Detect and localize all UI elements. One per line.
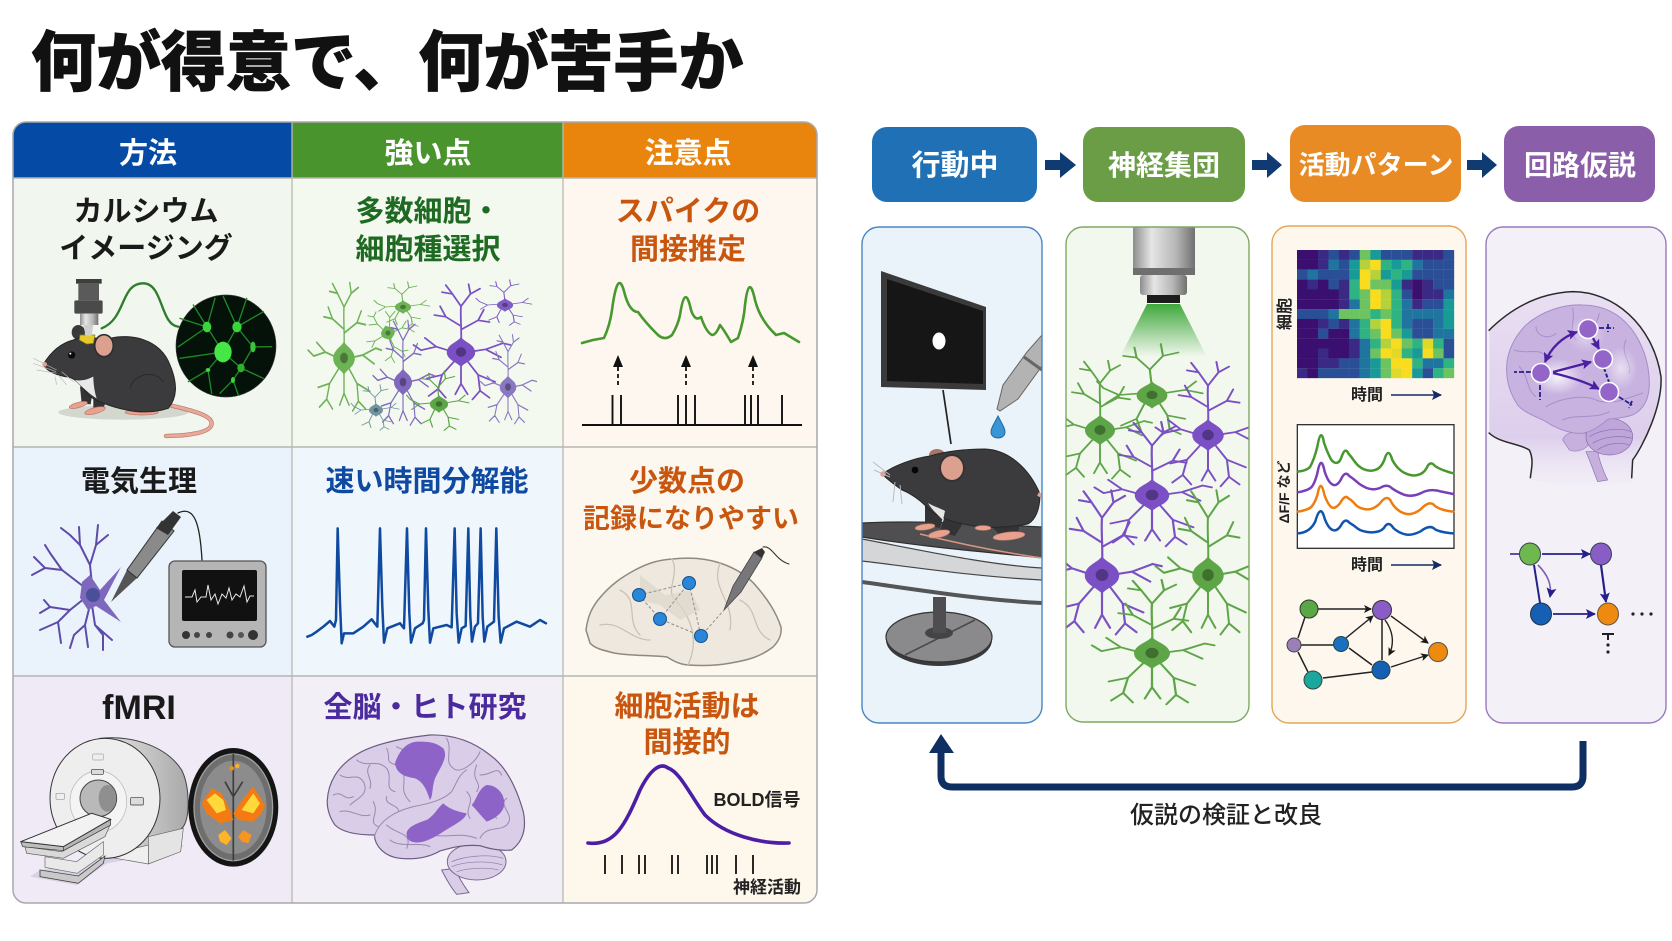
row 1 method label xyxy=(59,196,233,265)
pill: 行動中 xyxy=(872,127,1037,202)
panel: behaving mouse xyxy=(862,227,1042,723)
feedback label: 仮説の検証と改良 xyxy=(1130,802,1322,829)
row 3 caution label xyxy=(614,690,760,759)
illustration: whole brain with purple activation xyxy=(327,735,525,894)
chart: activity heatmap xyxy=(1297,250,1454,378)
pill: 神経集団 xyxy=(1083,127,1245,202)
row 1 caution label: 間接推定 xyxy=(630,233,746,266)
row 1 method label: イメージング xyxy=(59,232,233,265)
panel: neuron population xyxy=(1065,226,1250,723)
panel: comparison table xyxy=(13,122,817,903)
row 2 strength label: 速い時間分解能 xyxy=(325,465,529,498)
arrow xyxy=(1467,152,1497,178)
time axis label: 時間 xyxy=(1351,386,1383,404)
icon: reward nozzle and droplet xyxy=(991,335,1042,438)
pill: 活動パターン: 活動パターン xyxy=(1299,150,1453,180)
row 2 caution label xyxy=(583,465,799,534)
diagram: simplified circuit graph xyxy=(1510,543,1653,654)
diagram: activity network xyxy=(1287,600,1448,689)
panel: activity patterns xyxy=(1272,226,1466,723)
row 2 method label: 電気生理 xyxy=(81,465,197,498)
row 2 caution label: 少数点の xyxy=(629,465,745,498)
row 3 strength label: 全脳・ヒト研究 xyxy=(323,691,527,724)
icon: visual stimulus monitor xyxy=(881,271,986,444)
row 1 strength label: 細胞種選択 xyxy=(355,233,501,266)
illustration: treadmill and stand xyxy=(862,522,1042,666)
diagram: circuit overlay on brain xyxy=(1514,320,1632,408)
illustration: multiple neuron types xyxy=(308,280,537,430)
row 1 method label: カルシウム xyxy=(73,196,219,228)
row 3 caution label: 細胞活動は xyxy=(614,690,760,723)
row 1 strength label xyxy=(355,195,501,266)
title: 何が得意で、何が苦手か xyxy=(31,26,743,99)
row 1 strength label: 多数細胞・ xyxy=(355,195,501,228)
pill: 活動パターン xyxy=(1290,125,1461,202)
axis label: dF/F: ΔF/F など xyxy=(1276,461,1292,523)
time axis label xyxy=(1351,556,1441,574)
pill: 神経集団: 神経集団 xyxy=(1108,150,1220,181)
chart: fast spike electrophysiology trace xyxy=(307,528,546,643)
row 2 caution label: 記録になりやすい xyxy=(583,504,799,534)
illustration: head silhouette xyxy=(1489,292,1661,486)
header: 強い点: 強い点 xyxy=(384,137,472,170)
illustration: electrode, neuron and monitor xyxy=(32,511,266,650)
illustration: mouse on treadmill xyxy=(873,449,1042,542)
axis label: cells: 細胞 xyxy=(1276,298,1294,330)
time axis label xyxy=(1351,386,1441,404)
arrow: feedback loop xyxy=(929,734,1583,787)
arrow xyxy=(1252,152,1282,178)
illustration: brain xyxy=(1507,305,1649,482)
illustration: mouse with miniscope and calcium image xyxy=(33,279,276,436)
arrow xyxy=(1045,152,1076,178)
row 1 caution label: スパイクの xyxy=(616,196,760,228)
illustration: brain with sparse electrode sites xyxy=(586,547,789,666)
pill: 回路仮説 xyxy=(1504,126,1655,202)
illustration: neurons xyxy=(1066,343,1248,706)
pill: 行動中: 行動中 xyxy=(911,149,999,182)
illustration: MRI scanner and activation map xyxy=(21,738,278,885)
chart: fluorescence traces xyxy=(1297,425,1454,548)
chart: BOLD response vs neural activity xyxy=(588,766,801,897)
header: 方法: 方法 xyxy=(119,137,177,170)
row 3 caution label: 間接的 xyxy=(643,726,731,759)
chart: BOLD response vs neural activity: 神経活動 xyxy=(733,878,801,897)
chart: calcium trace with inferred spikes xyxy=(582,283,802,425)
row 3 method label: fMRI xyxy=(102,689,176,727)
chart: BOLD response vs neural activity: BOLD信号 xyxy=(714,790,800,810)
row 1 caution label xyxy=(616,196,760,266)
light beam xyxy=(1120,304,1207,357)
time axis label: 時間 xyxy=(1351,556,1383,574)
icon: microscope objective xyxy=(1133,227,1195,303)
panel: circuit hypothesis xyxy=(1486,227,1666,723)
header: 注意点: 注意点 xyxy=(644,137,732,170)
pill: 回路仮説: 回路仮説 xyxy=(1524,150,1636,181)
